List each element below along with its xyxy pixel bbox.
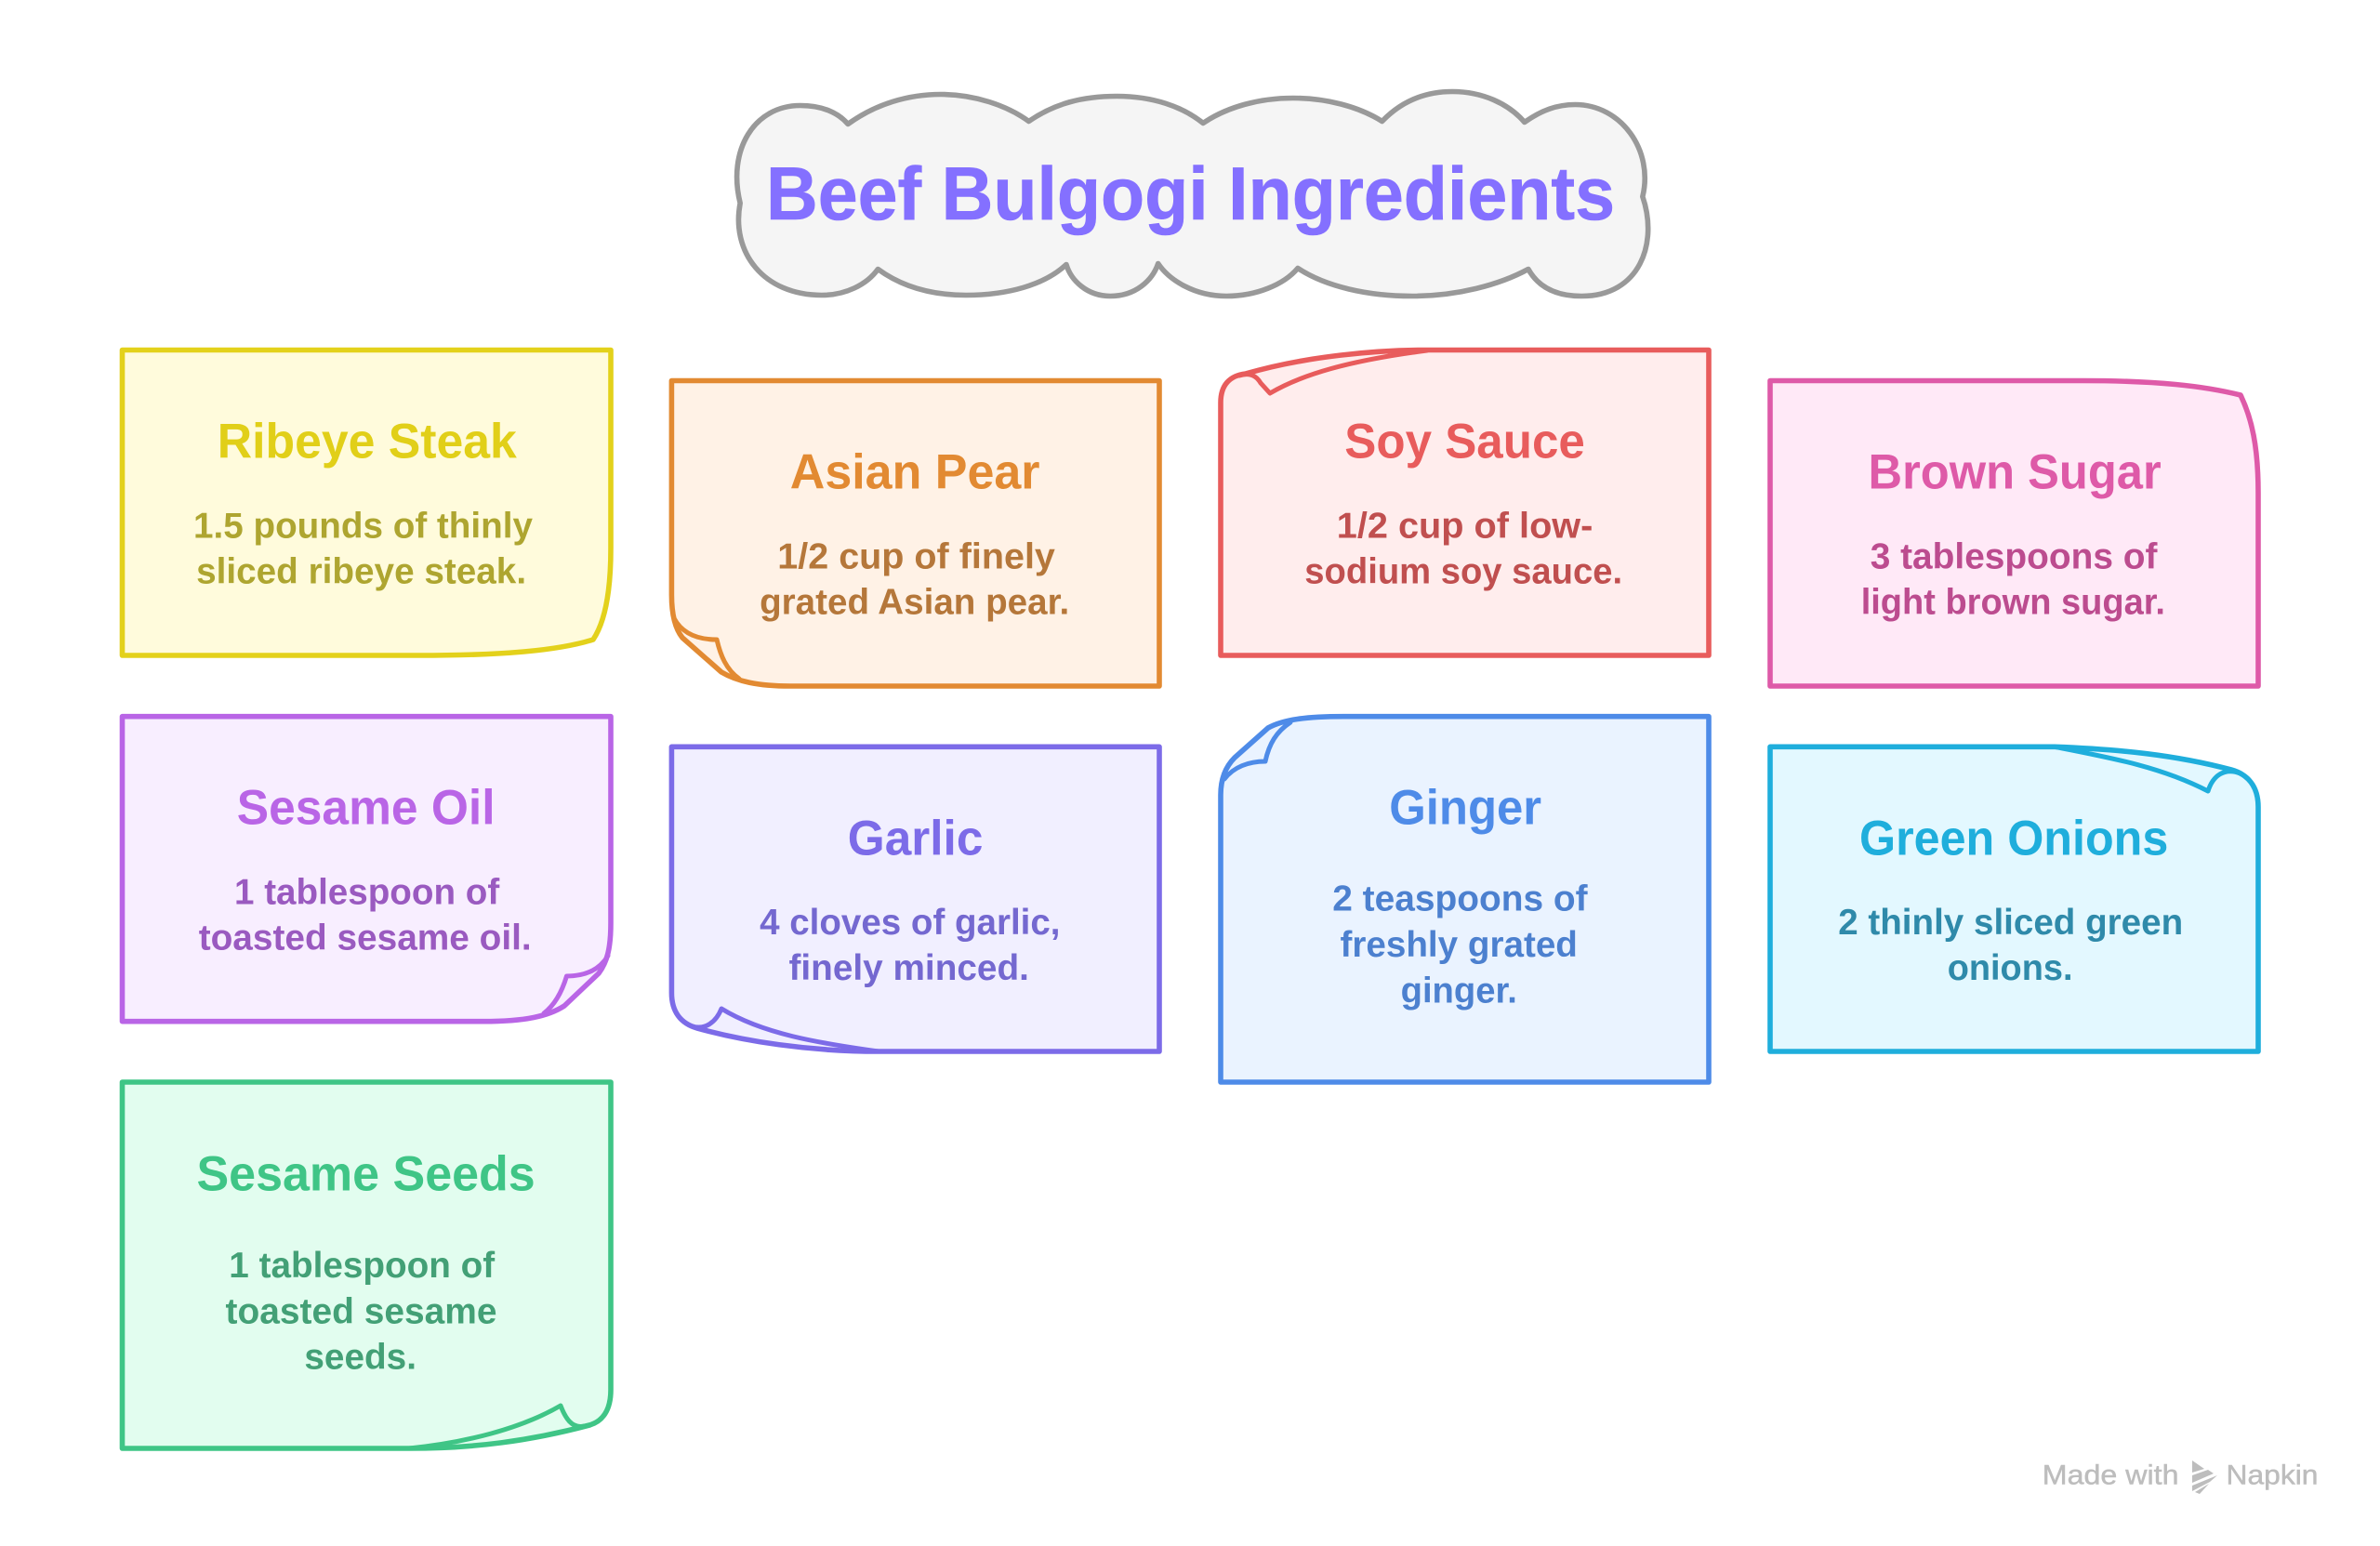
- description: finely minced.: [788, 948, 1029, 988]
- description: seeds.: [304, 1337, 416, 1377]
- heading: Brown Sugar: [1869, 445, 2162, 500]
- description: [1861, 537, 2165, 623]
- page curl: [1239, 350, 1427, 393]
- page curl: [693, 1009, 879, 1051]
- description: toasted sesame oil.: [199, 918, 532, 958]
- description: [760, 537, 1069, 623]
- brand name: Napkin: [2226, 1460, 2319, 1491]
- heading: Sesame Oil: [237, 781, 496, 836]
- description: 1 tablespoon of: [234, 872, 500, 912]
- footer label: Made with: [2043, 1460, 2179, 1491]
- title: [737, 91, 1648, 296]
- note shape: [671, 381, 1159, 686]
- note shape: [123, 1082, 611, 1448]
- note shape: [1221, 350, 1709, 655]
- page curl: [674, 618, 739, 679]
- description: 1.5 pounds of thinly: [193, 506, 533, 546]
- page curl: [409, 1406, 584, 1448]
- panel: Ginger: [1221, 717, 1709, 1082]
- description: [1838, 903, 2183, 988]
- panel: Garlic: [671, 747, 1159, 1051]
- description: 2 teaspoons of: [1332, 879, 1589, 919]
- footer: Made with Napkin: [2043, 1460, 2319, 1494]
- description: [225, 1246, 496, 1377]
- description: 1/2 cup of finely: [777, 537, 1055, 577]
- description: [193, 506, 533, 591]
- description: 1/2 cup of low-: [1337, 506, 1593, 546]
- heading: Sesame Seeds: [197, 1147, 536, 1202]
- page curl: [2055, 747, 2241, 791]
- panel: Sesame Oil: [123, 717, 611, 1022]
- description: freshly grated: [1341, 925, 1578, 965]
- description: toasted sesame: [225, 1291, 496, 1331]
- description: 3 tablespoons of: [1871, 537, 2159, 577]
- description: [199, 872, 532, 958]
- description: [1304, 506, 1622, 591]
- note shape: [1770, 381, 2258, 686]
- note shape: [1770, 747, 2258, 1051]
- panel: Green Onions: [1770, 747, 2258, 1051]
- note shape: [671, 747, 1159, 1051]
- note shape: [123, 350, 611, 655]
- description: grated Asian pear.: [760, 583, 1069, 623]
- description: onions.: [1948, 948, 2073, 988]
- note shape: [123, 717, 611, 1022]
- icon: Napkin logo: [2192, 1460, 2217, 1494]
- description: sodium soy sauce.: [1304, 551, 1622, 591]
- panel: Asian Pear: [671, 381, 1159, 686]
- page curl: [1224, 722, 1290, 779]
- page curl: [544, 956, 608, 1013]
- description: light brown sugar.: [1861, 583, 2165, 623]
- note shape: [1221, 717, 1709, 1082]
- heading: Green Onions: [1859, 812, 2168, 866]
- heading: Asian Pear: [790, 445, 1039, 500]
- description: sliced ribeye steak.: [196, 551, 526, 591]
- heading: Ginger: [1389, 781, 1541, 836]
- description: 1 tablespoon of: [229, 1246, 496, 1286]
- panel: Soy Sauce: [1221, 350, 1709, 655]
- title cloud: [737, 91, 1648, 296]
- description: 4 cloves of garlic,: [760, 903, 1060, 943]
- heading: Soy Sauce: [1344, 414, 1585, 469]
- description: 2 thinly sliced green: [1838, 903, 2183, 943]
- panel: Ribeye Steak: [123, 350, 611, 655]
- description: ginger.: [1401, 971, 1517, 1011]
- heading: Garlic: [848, 812, 983, 866]
- panel: Brown Sugar: [1770, 381, 2258, 686]
- heading: Ribeye Steak: [218, 414, 517, 469]
- panel: Sesame Seeds: [123, 1082, 611, 1448]
- description: [1332, 879, 1589, 1011]
- description: [760, 903, 1060, 988]
- title text: Beef Bulgogi Ingredients: [766, 152, 1615, 236]
